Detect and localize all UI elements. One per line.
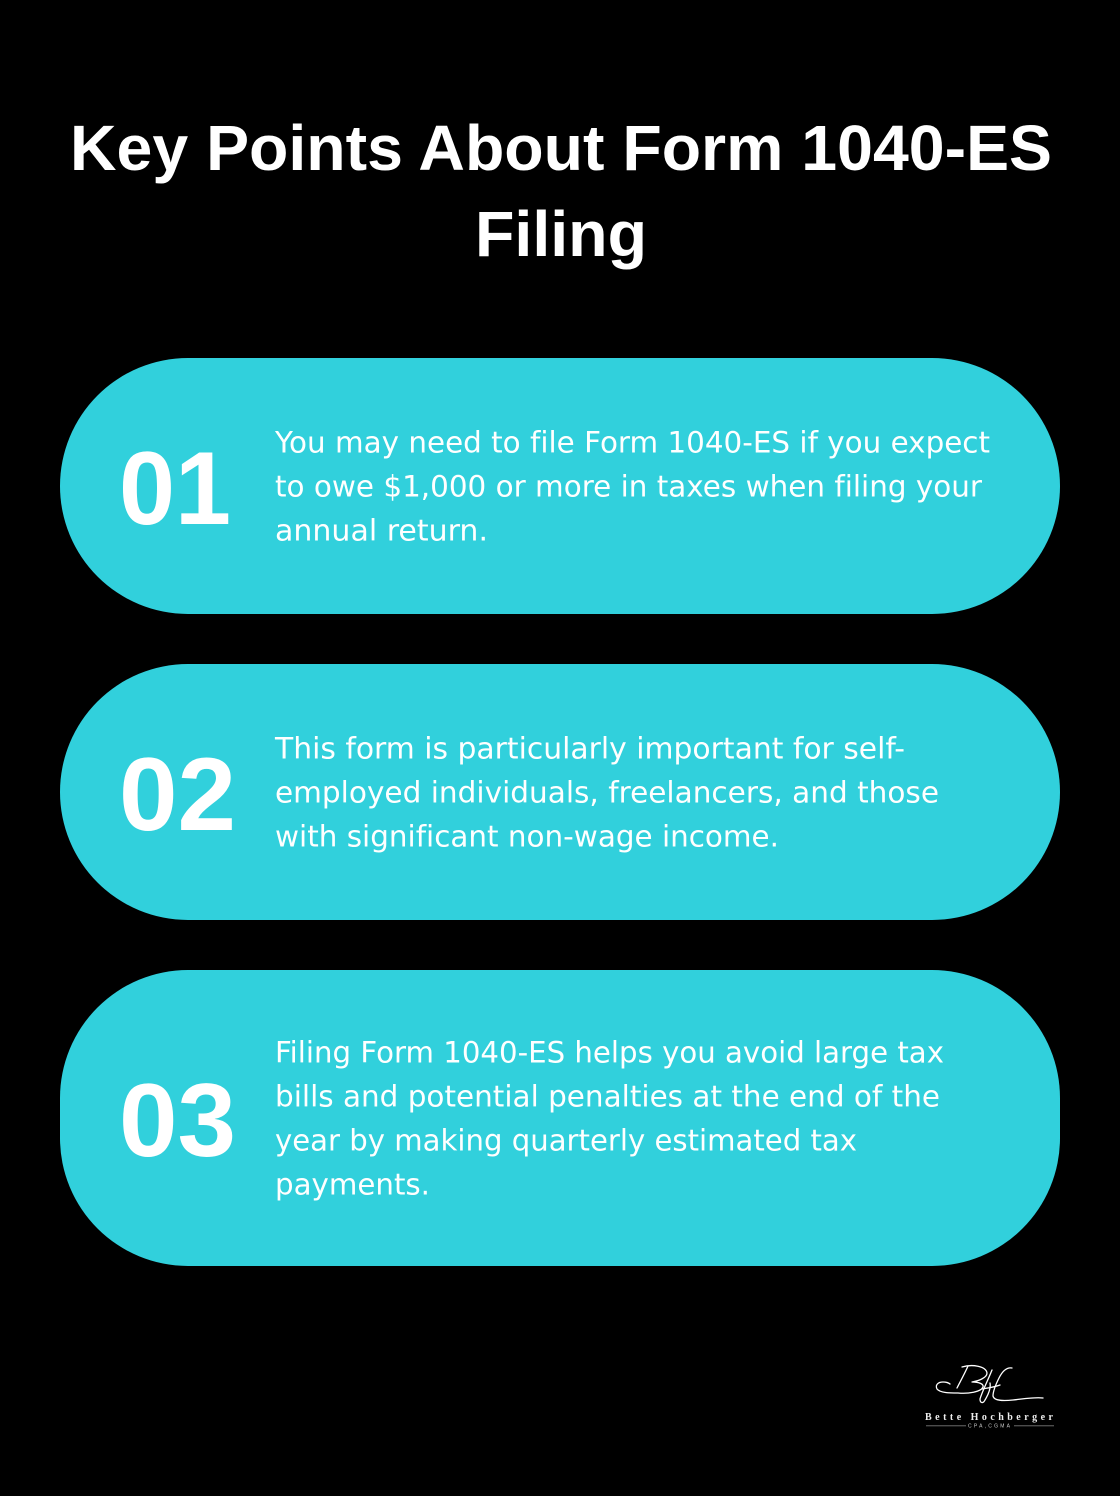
text block: point 02: This form is particularly important for self- [274,732,905,766]
text block: point 03: year by making quarterly estimated tax [275,1124,857,1158]
text block: point 01 [274,426,990,548]
title: Filing [475,198,647,270]
number 02: 02 [119,737,236,853]
brand name: Bette Hochberger [925,1412,1054,1423]
text block: point 03: Filing Form 1040-ES helps you avoid large tax [275,1036,944,1070]
title [70,112,1052,270]
text block: point 03: bills and potential penalties at the end of the [275,1080,940,1114]
text block: point 01: annual return. [275,514,488,548]
number 01: 01 [119,431,231,547]
logo: Bette Hochberger [925,1366,1054,1430]
number 03: 03 [119,1063,236,1179]
text block: point 02: employed individuals, freelancers, and those [275,776,939,810]
panel: point 01 [60,358,1060,614]
icon: signature [936,1366,1043,1403]
text block: point 02 [274,732,939,854]
text block: point 01: to owe $1,000 or more in taxes when filing your [275,470,983,504]
title: Key Points About Form 1040-ES [70,112,1052,184]
panel: point 02 [60,664,1060,920]
credentials: CPA,CGMA [968,1424,1011,1430]
text block: point 01: You may need to file Form 1040-ES if you expect [274,426,990,460]
panel: point 03 [60,970,1060,1266]
text block: point 02: with significant non-wage income. [275,820,779,854]
text block: point 03: payments. [275,1168,430,1202]
text block: point 03 [275,1036,944,1202]
